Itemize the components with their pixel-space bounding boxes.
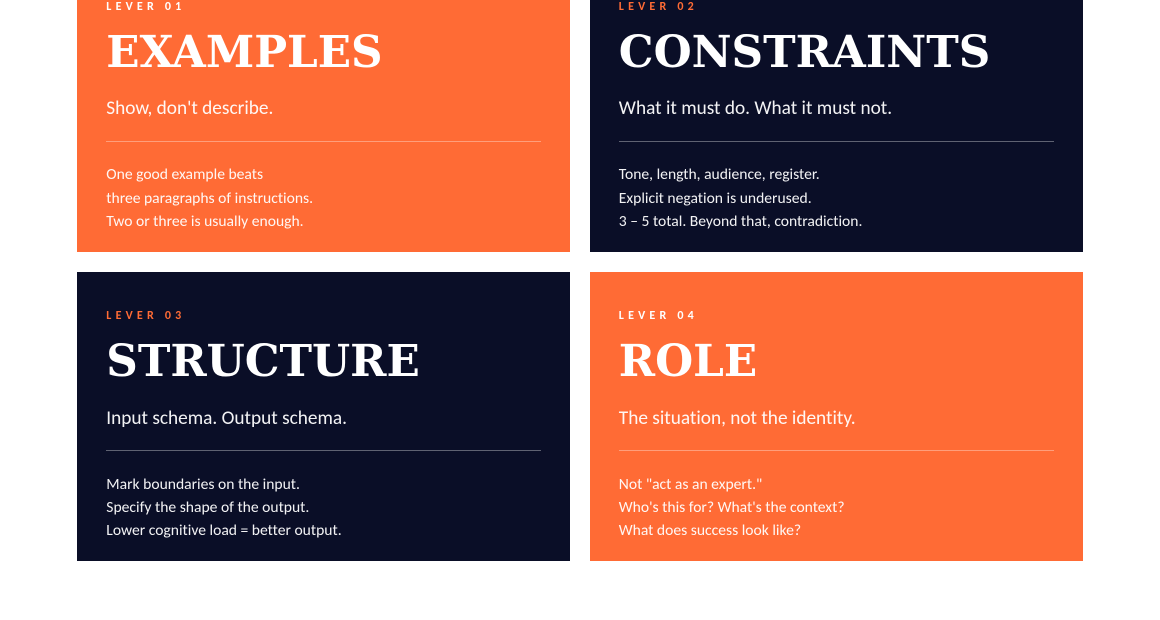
text block: role: [618, 475, 845, 540]
text block: examples: One good example beats: [106, 165, 263, 184]
label: lever 01: LEVER 01: [106, 0, 185, 14]
text block: structure: Mark boundaries on the input.: [106, 475, 300, 494]
label: lever 04: LEVER 04: [619, 309, 698, 323]
text block: structure: [106, 475, 342, 540]
text block: constraints: [618, 165, 862, 231]
text block: examples: [106, 165, 313, 231]
heading: constraints: CONSTRAINTS: [619, 27, 990, 78]
heading: role: ROLE: [619, 336, 757, 387]
text block: examples: three paragraphs of instructions.: [106, 189, 313, 208]
panel: structure: [77, 272, 570, 561]
text block: role: Not "act as an expert.": [619, 475, 762, 494]
text block: constraints: 3 – 5 total. Beyond that, contradiction.: [619, 212, 862, 231]
subheading: structure: Input schema. Output schema.: [106, 407, 347, 430]
text block: structure: Specify the shape of the output.: [106, 498, 309, 517]
heading: examples: EXAMPLES: [106, 27, 383, 78]
label: lever 03: LEVER 03: [106, 309, 185, 323]
subheading: role: The situation, not the identity.: [619, 407, 856, 430]
text block: role: What does success look like?: [619, 521, 801, 540]
text block: structure: Lower cognitive load = better output.: [106, 521, 342, 540]
panel: examples: [77, 0, 570, 252]
text block: constraints: Tone, length, audience, register.: [619, 165, 820, 184]
text block: role: Who's this for? What's the context?: [619, 498, 845, 517]
text block: examples: Two or three is usually enough.: [106, 212, 304, 231]
subheading: examples: Show, don't describe.: [106, 97, 273, 120]
heading: structure: STRUCTURE: [106, 336, 420, 387]
panel: role: [590, 272, 1083, 561]
text block: constraints: Explicit negation is underused.: [619, 189, 812, 208]
panel: constraints: [590, 0, 1083, 252]
label: lever 02: LEVER 02: [619, 0, 698, 14]
subheading: constraints: What it must do. What it must not.: [619, 97, 892, 120]
